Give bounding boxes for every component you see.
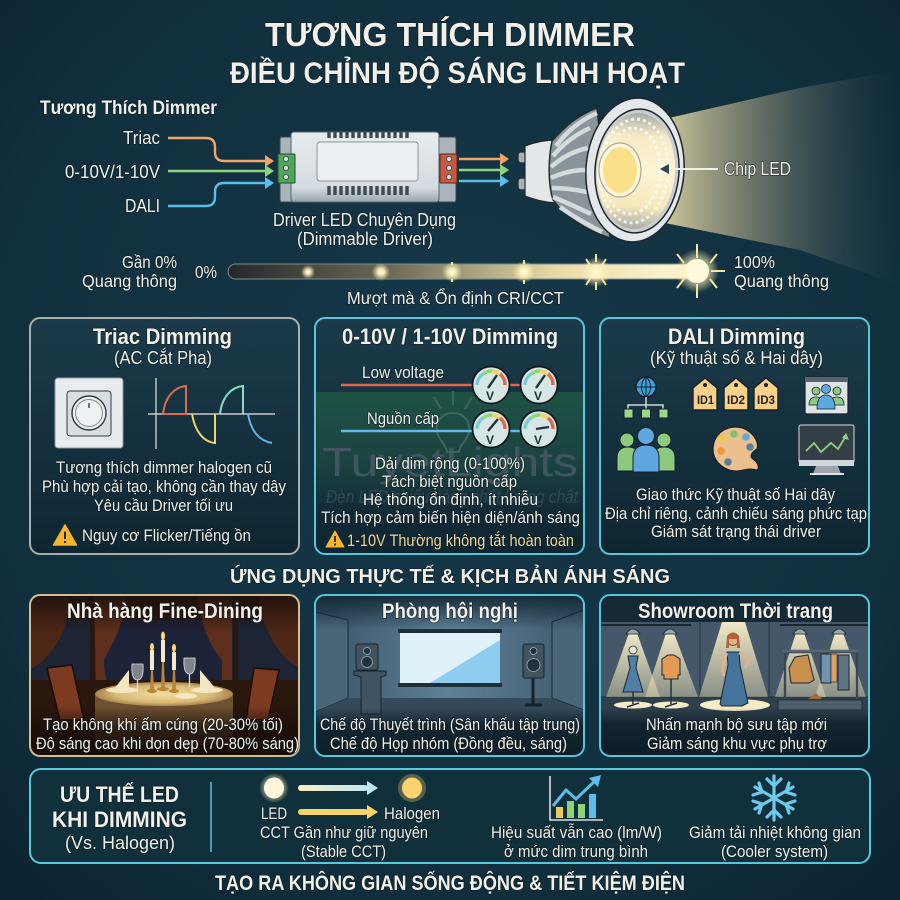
light beam	[660, 70, 900, 285]
panel title: Phòng hội nghị	[382, 600, 518, 623]
panel: DALI dimming	[600, 318, 869, 554]
title: TƯƠNG THÍCH DIMMER	[265, 16, 635, 53]
icon: snowflake	[753, 776, 795, 820]
icons: ID tags	[693, 378, 778, 410]
watermark: TuyetLights	[322, 439, 578, 485]
text block: Tương thích dimmer halogen cũ	[56, 459, 272, 477]
icons: voltmeter gauges: V	[486, 389, 494, 403]
icon: group of people	[617, 428, 675, 472]
GU10 LED bulb	[518, 95, 689, 245]
text block: Giám sát trạng thái driver	[651, 523, 821, 541]
dimming bar labels left: 0%	[195, 262, 217, 282]
text block: Hệ thống ổn định, ít nhiễu	[363, 490, 538, 509]
dimming bar labels left	[82, 252, 217, 291]
panel: fashion showroom	[600, 595, 869, 756]
caption: Chế độ Họp nhóm (Đồng đều, sáng)	[330, 735, 567, 753]
icons: voltmeter gauges: V	[534, 389, 542, 403]
caption: cooler: (Cooler system)	[721, 843, 828, 861]
icons: ID tags: ID3	[757, 395, 775, 407]
caption: efficiency	[491, 823, 662, 861]
text block: Phù hợp cải tạo, không cần thay dây	[42, 478, 287, 496]
caption: stable CCT: (Stable CCT)	[301, 843, 386, 861]
panel title: Triac Dimming	[93, 324, 232, 349]
LED driver	[278, 132, 457, 202]
icon: user window	[805, 377, 848, 414]
caption: Chế độ Thuyết trình (Sân khấu tập trung)	[320, 716, 580, 734]
caption: efficiency: Hiệu suất vẫn cao (lm/W)	[491, 823, 662, 842]
title	[230, 16, 685, 90]
caption: efficiency: ở mức dim trung bình	[504, 843, 648, 861]
dimming bar labels left: Quang thông	[82, 271, 177, 291]
caption: Tạo không khí ấm cúng (20-30% tối)	[43, 716, 283, 734]
icon: palette	[713, 427, 758, 471]
panel title	[93, 324, 232, 368]
dimming bar	[228, 244, 725, 298]
scene: candlelit table	[30, 595, 299, 756]
heading: KHI DIMMING	[52, 807, 187, 832]
title: ĐIỀU CHỈNH ĐỘ SÁNG LINH HOẠT	[230, 56, 685, 90]
text block: Giao thức Kỹ thuật số Hai dây	[636, 486, 836, 504]
dimming bar labels right: Quang thông	[734, 271, 829, 291]
caption: Độ sáng cao khi dọn dẹp (70-80% sáng)	[36, 735, 299, 753]
caption: Nhấn mạnh bộ sưu tập mới	[646, 716, 827, 734]
icon: dimmer switch	[55, 378, 123, 448]
icon: efficiency chart	[550, 775, 603, 820]
text block	[321, 455, 580, 527]
caption: cooler	[689, 824, 861, 861]
heading: dimmer compatibility: Tương Thích Dimmer	[40, 98, 218, 119]
heading: (Vs. Halogen)	[65, 833, 175, 853]
caption: cooler: Giảm tải nhiệt không gian	[689, 824, 861, 842]
stable CCT illustration: LED	[261, 805, 287, 823]
text block: Địa chỉ riêng, cảnh chiếu sáng phức tạp	[605, 505, 867, 523]
panel title: DALI Dimming	[668, 324, 805, 349]
dimming bar labels left: Gần 0%	[122, 252, 177, 272]
panel: LED advantages	[30, 769, 870, 863]
panel: fine-dining restaurant	[30, 595, 299, 756]
panel title: Nhà hàng Fine-Dining	[67, 600, 263, 623]
caption	[646, 716, 827, 753]
panel title	[650, 324, 823, 368]
driver label: (Dimmable Driver)	[297, 229, 433, 249]
section heading: applications: ỨNG DỤNG THỰC TẾ & KỊCH BẢN ÁNH SÁNG	[230, 564, 670, 588]
stable CCT illustration	[259, 773, 440, 823]
output arrows	[459, 153, 509, 187]
panel title: Showroom Thời trang	[638, 600, 833, 623]
panel: conference room	[315, 595, 584, 756]
panel title: 0-10V / 1-10V Dimming	[342, 324, 558, 349]
driver label: Driver LED Chuyên Dụng	[273, 210, 456, 230]
panel: Triac dimming	[30, 318, 299, 554]
caption: stable CCT	[260, 824, 428, 861]
dimming bar labels right: 100%	[734, 252, 775, 272]
panel: 0-10V dimming	[315, 318, 584, 554]
heading	[52, 782, 187, 853]
input protocol labels	[65, 128, 160, 216]
text block: Tích hợp cảm biến hiện diện/ánh sáng	[321, 509, 580, 527]
input protocol labels: Triac	[123, 128, 160, 148]
text block	[605, 486, 867, 541]
caption	[36, 716, 299, 753]
scene: showroom spotlights	[600, 595, 869, 756]
panel title: (AC Cắt Pha)	[114, 347, 212, 368]
footer slogan: TẠO RA KHÔNG GIAN SỐNG ĐỘNG & TIẾT KIỆM ĐIỆN	[215, 871, 685, 895]
caption: stable CCT: CCT Gần như giữ nguyên	[260, 824, 428, 842]
text block	[42, 459, 287, 515]
scene: conference room with screen	[315, 595, 584, 756]
input arrows	[168, 138, 274, 206]
caption	[320, 716, 580, 753]
icons: voltmeter gauges: V	[486, 433, 494, 447]
chip LED callout: Chip LED	[724, 159, 791, 179]
supply line: Nguồn cấp	[367, 410, 439, 428]
panel title: (Kỹ thuật số & Hai dây)	[650, 348, 823, 368]
chart: phase cut waveform	[148, 378, 275, 449]
text block: Yêu cầu Driver tối ưu	[94, 497, 233, 515]
text block: Dải dim rộng (0-100%)	[375, 455, 525, 473]
warning: 1-10V Thường không tắt hoàn toàn	[347, 531, 574, 550]
smooth caption: Mượt mà & Ổn định CRI/CCT	[347, 287, 564, 308]
input protocol labels: 0-10V/1-10V	[65, 162, 160, 182]
text block: Tách biệt nguồn cấp	[382, 473, 517, 491]
icons: voltmeter gauges: V	[534, 433, 542, 447]
watermark	[316, 391, 583, 514]
chip LED callout	[660, 159, 791, 179]
stable CCT illustration: Halogen	[384, 805, 440, 823]
warning: Nguy cơ Flicker/Tiếng ồn	[82, 527, 251, 545]
heading: ƯU THẾ LED	[60, 782, 179, 807]
watermark: Đèn LED chiếu sáng chất lượng chất	[326, 487, 579, 507]
input protocol labels: DALI	[125, 196, 160, 216]
low voltage line: Low voltage	[362, 364, 444, 382]
driver label	[273, 210, 456, 249]
icon: network tree	[624, 377, 668, 418]
icons: voltmeter gauges	[472, 366, 558, 448]
dimming bar labels right	[734, 252, 829, 291]
icons: ID tags: ID2	[727, 395, 745, 407]
glow points	[301, 244, 725, 298]
caption: Giảm sáng khu vực phụ trợ	[647, 735, 827, 753]
icon: monitor chart	[799, 425, 854, 475]
icons: ID tags: ID1	[697, 395, 715, 407]
